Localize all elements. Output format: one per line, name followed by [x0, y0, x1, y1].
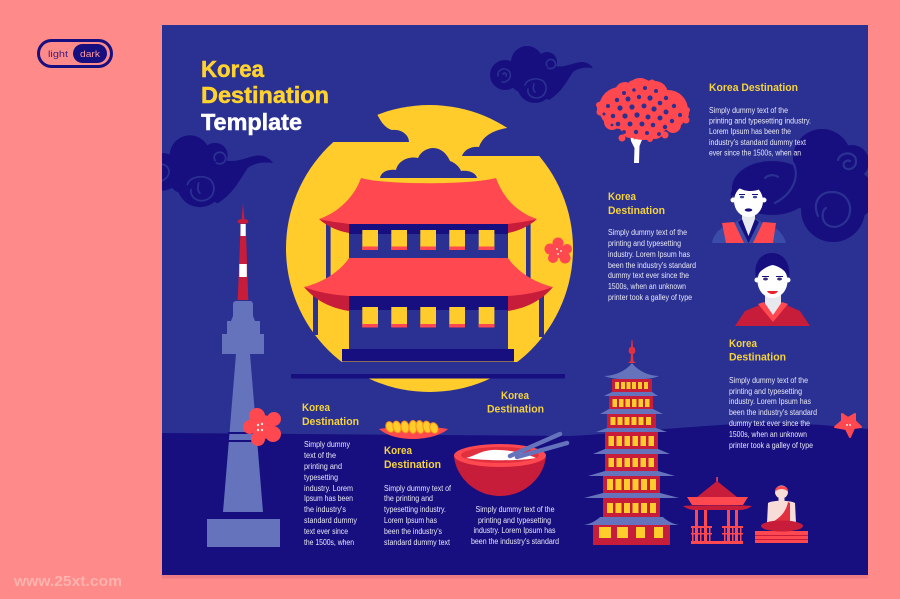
- icon: woman: [735, 253, 810, 326]
- icon: cloud top: [490, 46, 593, 103]
- text block: top right: Lorem Ipsum has been the: [709, 127, 791, 136]
- text block: top right: Simply dummy text of the: [709, 106, 788, 115]
- text block: middle: printer took a galley of type: [608, 293, 692, 302]
- text block: lower right: printing and typesetting: [729, 387, 802, 396]
- building: temple: [304, 178, 553, 362]
- text block: lower right: industry. Lorem Ipsum has: [729, 397, 811, 406]
- text block: bottom left: [302, 402, 359, 547]
- title: [201, 56, 329, 135]
- toggle: light dark: [38, 40, 112, 66]
- text block: bottom left: text of the: [304, 451, 336, 460]
- icon: pavilion: [683, 477, 752, 544]
- text block: middle: dummy text ever since the: [608, 271, 689, 280]
- icon: flower on tower: [243, 408, 281, 446]
- text block: lower right: dummy text ever since the: [729, 419, 810, 428]
- text block: bottom right of centre: Destination: [487, 404, 544, 416]
- icon: flower right: [835, 414, 861, 437]
- icon: cloud left: [162, 135, 273, 208]
- icon: man: [712, 188, 786, 243]
- text block: lower right: 1500s, when an unknown: [729, 430, 807, 439]
- text block: bottom centre: standard dummy text: [384, 538, 451, 547]
- icon: rice bowl: [454, 434, 567, 496]
- text block: middle: been the industry's standard: [608, 261, 696, 270]
- icon: cherry tree: [596, 78, 690, 163]
- upper eave shadow: [319, 219, 537, 233]
- text block: lower right: Simply dummy text of the: [729, 376, 808, 385]
- text block: top right: Korea Destination: [709, 82, 798, 94]
- text block: middle: [608, 191, 696, 302]
- icon: pagoda: [584, 340, 679, 545]
- toggle: light dark: dark: [80, 49, 100, 60]
- text block: middle: 1500s, when an unknown: [608, 282, 686, 291]
- temple base: [342, 349, 514, 362]
- icon: buddha statue: [755, 486, 808, 543]
- upper roof: [319, 178, 537, 224]
- text block: bottom centre: [384, 445, 452, 547]
- text block: lower right: [729, 338, 817, 450]
- text block: bottom left: text ever since: [304, 527, 348, 536]
- icon: flower on moon: [544, 238, 572, 264]
- icon: kimbap plate: [379, 420, 448, 439]
- icon: moon: [286, 105, 573, 392]
- ground line: [291, 374, 565, 378]
- panel background: [162, 25, 868, 436]
- ground: [162, 423, 868, 575]
- upper wall: [349, 234, 508, 258]
- upper windows: [362, 230, 494, 250]
- text block: bottom left: Ipsum has been: [304, 494, 353, 503]
- panel: main poster: [143, 25, 875, 575]
- text block: bottom left: typesetting: [304, 473, 338, 482]
- text block: top right: ever since the 1500s, when an: [709, 149, 801, 158]
- text block: bottom centre: Destination: [384, 459, 441, 471]
- text block: lower right: Korea: [729, 338, 758, 350]
- text block: bottom centre: the printing and: [384, 494, 433, 503]
- text block: bottom right of centre: Korea: [501, 390, 530, 402]
- text block: bottom left: Korea: [302, 402, 331, 414]
- moon cut-out: right cloud: [462, 128, 540, 156]
- icon: Seoul tower: [207, 203, 280, 547]
- text block: top right: printing and typesetting industry.: [709, 116, 811, 126]
- toggle: light dark: light: [48, 49, 68, 60]
- lower eave shadow: [304, 287, 553, 311]
- text block: middle: Destination: [608, 205, 665, 217]
- text block: bottom left: the 1500s, when: [304, 538, 354, 547]
- text block: bottom right of centre: Simply dummy text of the: [476, 505, 555, 514]
- text block: bottom centre: Lorem Ipsum has: [384, 516, 437, 525]
- lower windows: [362, 307, 494, 328]
- lower columns: [313, 296, 318, 335]
- text block: bottom centre: been the industry's: [384, 527, 442, 536]
- text block: bottom left: Destination: [302, 416, 359, 428]
- text block: middle: printing and typesetting: [608, 239, 681, 248]
- icon: cloud right: [732, 129, 875, 242]
- text block: top right: industry's standard dummy text: [709, 138, 807, 147]
- text block: bottom centre: Simply dummy text of: [384, 484, 452, 493]
- text block: bottom right of centre: [471, 390, 559, 546]
- text block: bottom left: printing and: [304, 462, 342, 471]
- watermark: www.25xt.com: [13, 574, 122, 590]
- text block: bottom centre: Korea: [384, 445, 413, 457]
- moon cloud: [380, 148, 477, 178]
- title: Template: [201, 109, 302, 135]
- text block: bottom left: the industry's: [304, 505, 346, 514]
- title: Destination: [201, 82, 329, 108]
- text block: bottom left: Simply dummy: [304, 440, 350, 449]
- lower wall: [349, 310, 508, 349]
- text block: middle: Simply dummy text of the: [608, 228, 687, 237]
- text block: lower right: printer took a galley of type: [729, 441, 813, 450]
- text block: bottom centre: typesetting industry.: [384, 505, 446, 514]
- strip under building: [342, 362, 517, 374]
- lower roof: [304, 258, 553, 296]
- text block: middle: Korea: [608, 191, 637, 203]
- panel shadow: [162, 575, 868, 578]
- text block: bottom left: standard dummy: [304, 516, 357, 525]
- text block: bottom left: industry. Lorem: [304, 484, 353, 493]
- text block: lower right: Destination: [729, 352, 786, 364]
- text block: top right: [709, 82, 811, 158]
- text block: middle: industry. Lorem Ipsum has: [608, 250, 690, 259]
- upper columns: [326, 222, 331, 284]
- text block: bottom right of centre: printing and typesetting: [478, 516, 551, 525]
- text block: bottom right of centre: industry. Lorem Ipsum has: [474, 526, 556, 535]
- moon cut-out: left cloud: [334, 114, 409, 142]
- text block: bottom right of centre: been the industry's standard: [471, 537, 559, 546]
- title: Korea: [201, 56, 264, 82]
- text block: lower right: been the industry's standard: [729, 408, 817, 417]
